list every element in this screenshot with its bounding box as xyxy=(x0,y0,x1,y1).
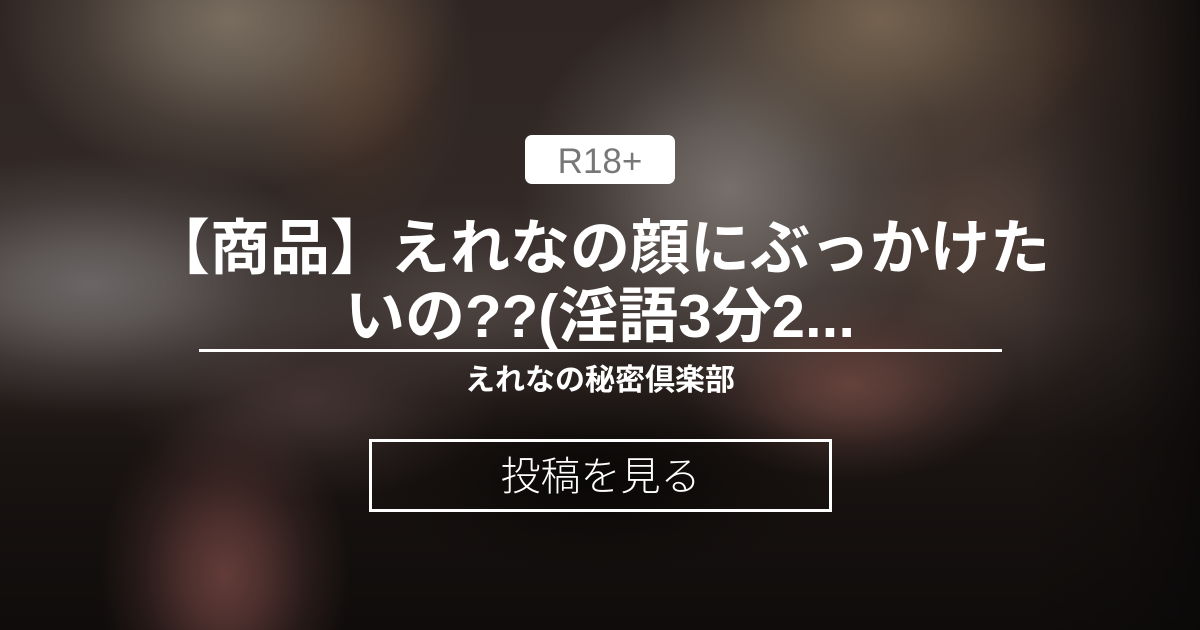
age rating badge: R18+ xyxy=(558,142,642,181)
creator name: えれなの秘密倶楽部 xyxy=(465,364,735,397)
title: いの??(淫語3分2... xyxy=(345,283,855,350)
view post button xyxy=(369,439,832,512)
age rating badge xyxy=(525,135,675,184)
view post button: 投稿を見る xyxy=(500,455,700,499)
title: 【商品】えれなの顔にぶっかけた xyxy=(150,215,1050,282)
title xyxy=(150,215,1050,350)
title underline xyxy=(199,349,1002,352)
